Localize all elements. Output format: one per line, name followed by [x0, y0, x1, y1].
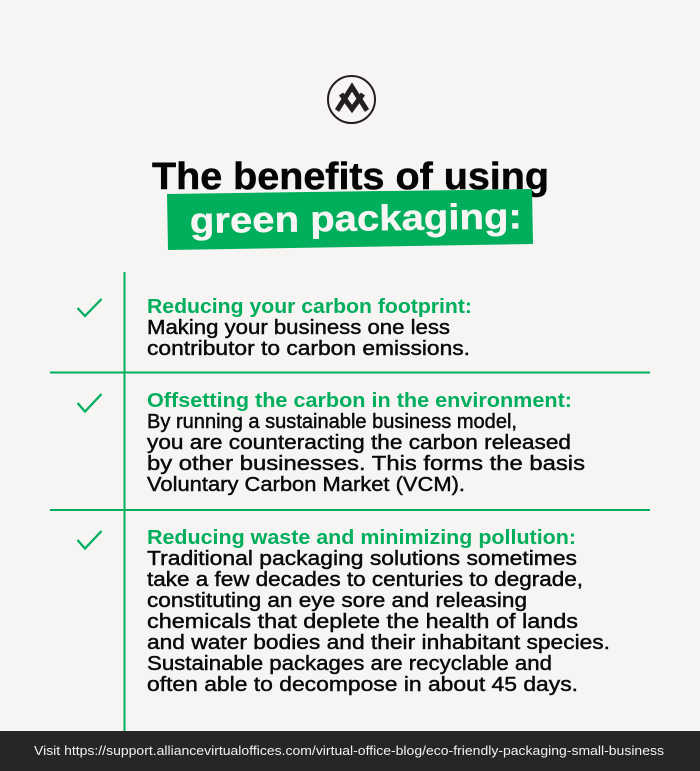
icon: check 3	[78, 531, 102, 548]
footer bar: Visit https://support.alliancevirtualoffices.com/virtual-office-blog/eco-friendly-packaging-small-business	[34, 743, 665, 758]
benefit 3: take a few decades to centuries to degrade,	[147, 569, 583, 591]
benefit 3: constituting an eye sore and releasing	[147, 590, 527, 612]
benefit 1: contributor to carbon emissions.	[147, 338, 470, 360]
title	[152, 156, 549, 250]
icon: logo	[328, 76, 375, 123]
table grid lines	[50, 272, 650, 731]
benefit 2	[147, 390, 585, 496]
benefit 3: Reducing waste and minimizing pollution:	[147, 527, 576, 549]
benefit 2: Offsetting the carbon in the environment:	[147, 390, 572, 412]
benefit 3: chemicals that deplete the health of lands	[147, 611, 578, 633]
benefit 2: By running a sustainable business model,	[147, 411, 517, 433]
footer bar	[0, 731, 700, 771]
benefit 3	[147, 527, 610, 696]
benefit 2: by other businesses. This forms the basis	[147, 453, 585, 475]
benefit 3: Traditional packaging solutions sometimes	[147, 548, 577, 570]
title highlight: green packaging:	[190, 195, 522, 241]
benefit 3: and water bodies and their inhabitant species.	[147, 632, 610, 654]
benefit 1: Reducing your carbon footprint:	[147, 296, 472, 318]
benefit 1	[147, 296, 472, 360]
benefit 3: Sustainable packages are recyclable and	[147, 653, 552, 675]
title: The benefits of using	[152, 156, 549, 198]
benefit 2: you are counteracting the carbon released	[147, 432, 571, 454]
icon: check 2	[78, 394, 102, 412]
benefit 1: Making your business one less	[147, 317, 450, 339]
icon: check 1	[78, 299, 102, 316]
title highlight	[167, 189, 533, 250]
benefit 3: often able to decompose in about 45 days.	[147, 674, 578, 696]
benefit 2: Voluntary Carbon Market (VCM).	[147, 474, 465, 496]
